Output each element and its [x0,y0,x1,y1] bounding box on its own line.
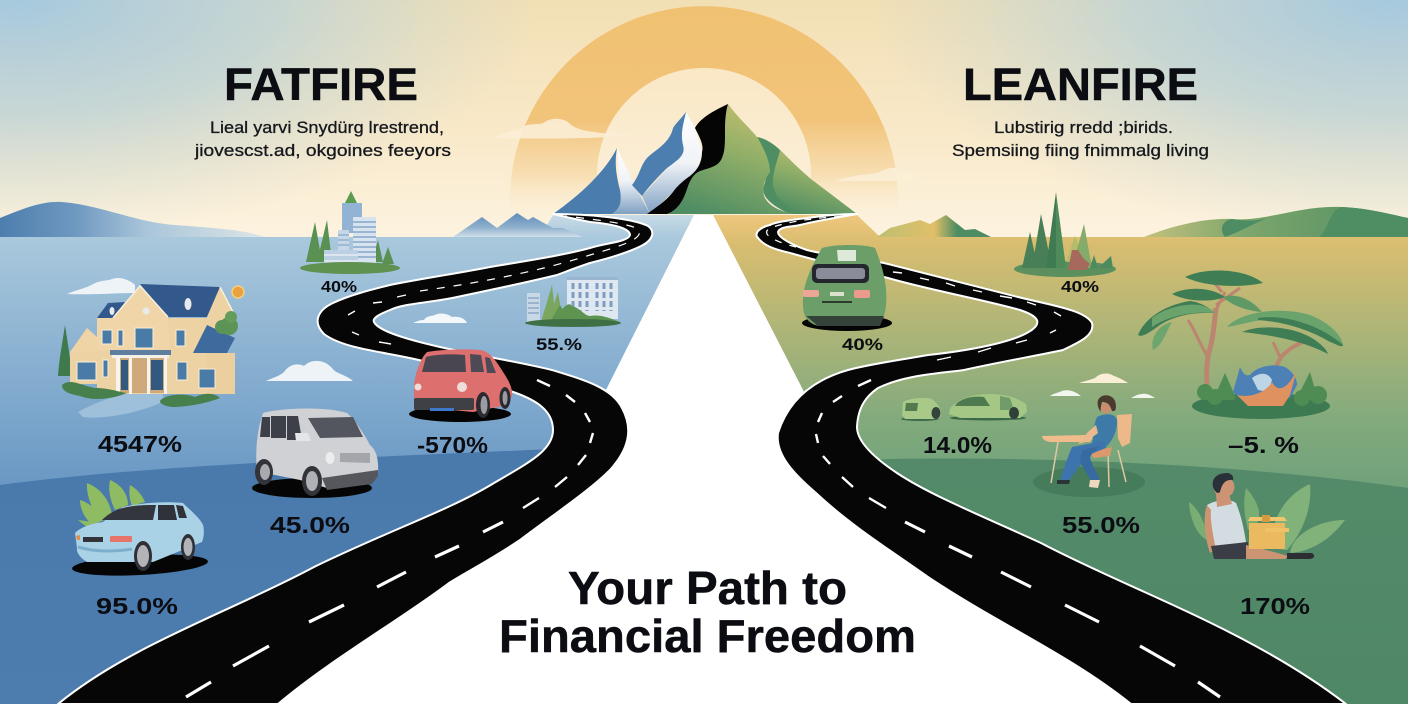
icon: person seated at desk [1033,395,1145,497]
canopies [1138,301,1215,336]
text block: fatfire description: jiovescst.ad, okgoines feeyors [194,141,451,160]
road: fatfire [58,214,652,704]
label: 40% fatfire top: 40% [321,279,357,296]
panel: fatfire landscape [0,215,694,704]
tree right [220,317,238,335]
label: 40% forest: 40% [1061,279,1099,296]
road dashes [767,216,1220,697]
white face peak left [612,148,650,214]
bushes [62,382,220,407]
green mountain front right [773,150,857,214]
text block: fatfire description [194,118,451,160]
front gable [97,286,170,350]
text block: leanfire description [952,118,1209,160]
label: 55.0%: 55.0% [1062,512,1140,538]
distant hills right [1144,207,1408,237]
white face peak right [642,112,702,214]
icon: forest on island [1014,192,1116,277]
right wing roof [193,325,235,353]
main title: Financial Freedom [499,610,916,662]
icon: blue car with leaves [72,480,208,579]
heading: leanfire: LEANFIRE [963,59,1198,110]
driveway [78,392,163,418]
label: -570%: -570% [417,432,488,458]
leaves [78,480,145,528]
heading: fatfire: FATFIRE [224,59,418,110]
road: leanfire [756,214,1346,704]
icon: mansion [58,278,244,418]
label: 40% van: 40% [842,335,883,354]
green mountain main [667,104,795,214]
cypress tree [58,325,71,376]
label: 45.0%: 45.0% [270,512,350,538]
icon: person with box and leaves [1189,473,1345,559]
central mountain group [553,104,857,214]
label: 4547%: 4547% [98,431,182,457]
blue peak right [632,112,686,196]
main roof [140,284,220,317]
road dashes [186,216,639,697]
label: 95.0%: 95.0% [96,593,178,619]
panel: leanfire landscape [713,215,1408,704]
label: 55.%: 55.% [536,335,582,354]
text block: fatfire description: Lieal yarvi Snydürg lrestrend, [210,118,444,137]
icon: small green cars [901,394,1027,421]
distant mountains left [453,213,583,237]
label: -5. %: –5. % [1228,432,1299,458]
hammock [1233,365,1297,398]
icon: office buildings on island [525,277,621,327]
icon: acacia trees on island [1138,270,1343,419]
windows [77,328,215,388]
right wing [193,353,235,394]
left wing [70,328,97,383]
black swoosh [647,104,728,214]
sun arch [510,6,898,216]
roof ornaments [110,298,192,315]
centre white path [170,215,1240,704]
distant mountains right [877,215,991,237]
shrubs [1197,372,1327,406]
portico [110,350,171,355]
sky background [0,0,1408,240]
clouds [266,119,1155,398]
icon: green van [802,245,892,331]
right gable [207,287,235,338]
cloud [67,278,135,294]
icon: white van [252,408,378,498]
main title: Your Path to [568,562,847,614]
icon: red car [409,349,512,422]
main title [499,562,916,662]
green back ridge [757,137,857,214]
side roof [97,302,125,318]
main body [97,318,207,394]
gold coin [232,286,244,298]
trunks [1188,280,1303,387]
label: 170%: 170% [1240,593,1310,619]
text block: leanfire description: Spemsiing fiing fnimmalg living [952,141,1209,160]
icon: city towers on island [300,191,400,274]
text block: leanfire description: Lubstirig rredd ;birids. [994,118,1173,137]
blue peak left [553,148,621,214]
distant hill left [0,202,265,237]
label: 14.0%: 14.0% [923,432,992,458]
